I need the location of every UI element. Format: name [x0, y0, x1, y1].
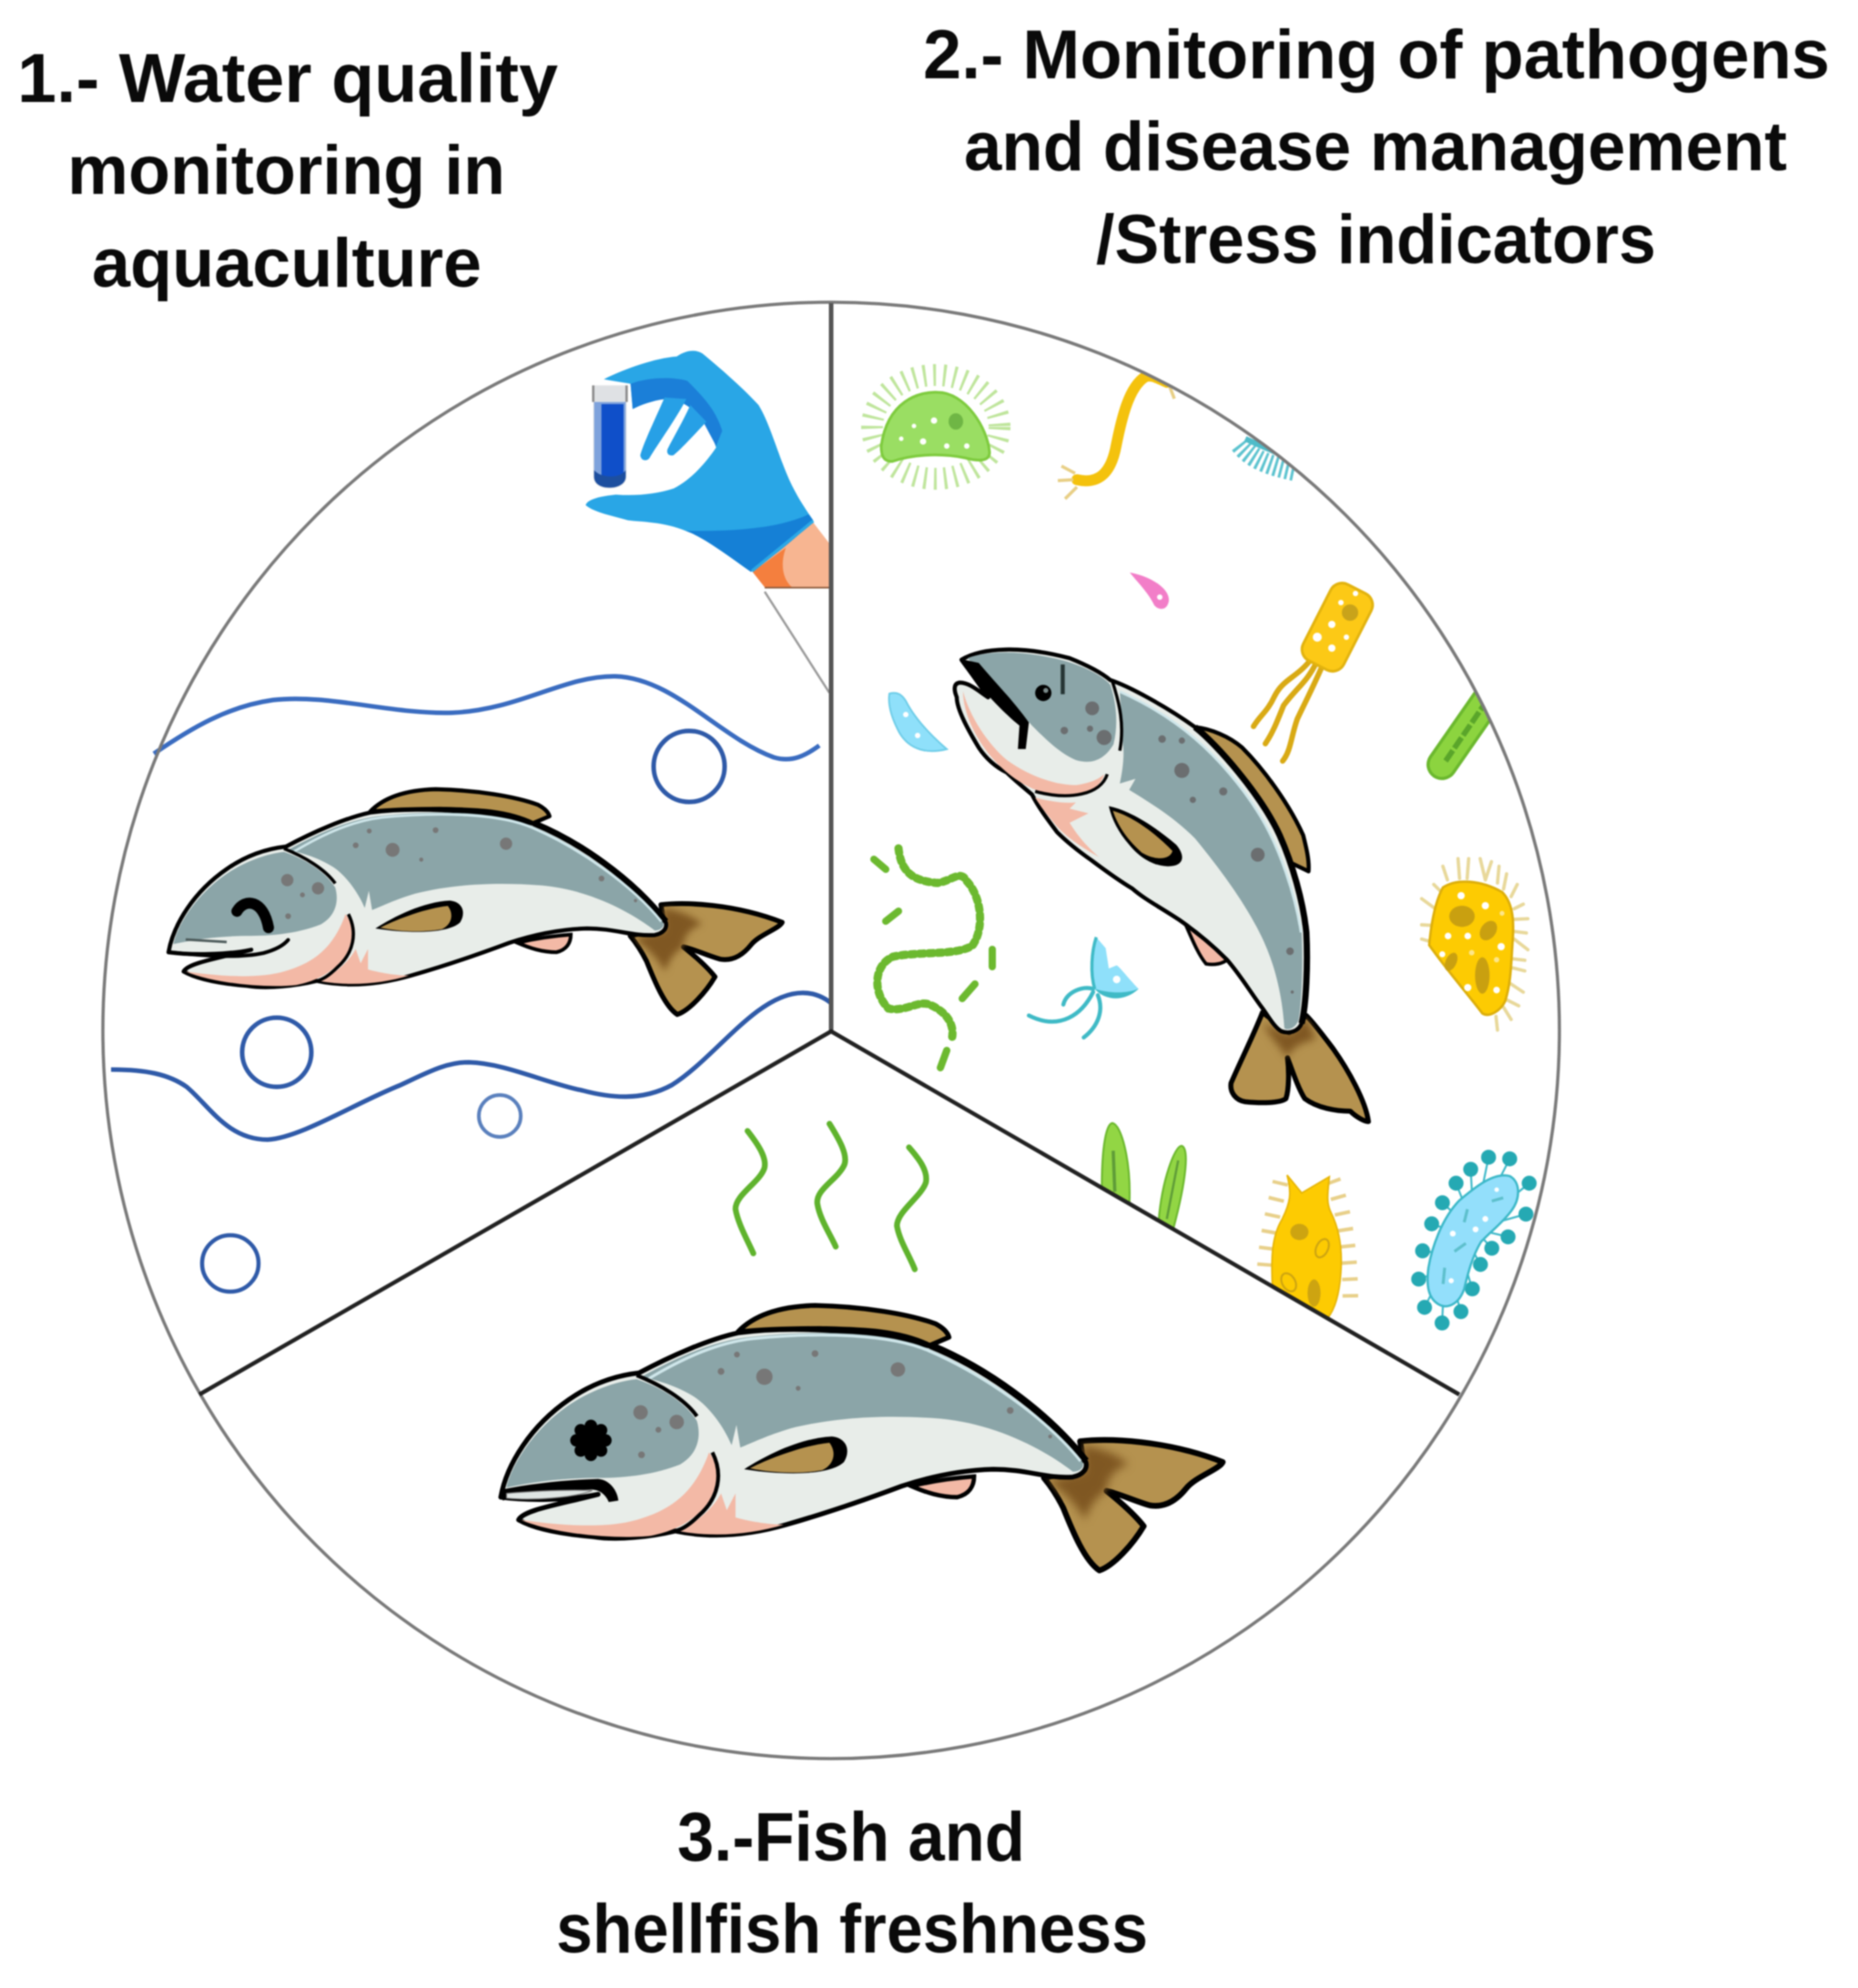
- panel: water quality sector: [111, 350, 831, 1292]
- thin pointer line under hand: [765, 592, 829, 693]
- fish: stressed salmon leaping: [955, 650, 1368, 1121]
- heading: sector 3: [556, 1799, 1148, 1968]
- air bubbles: [202, 731, 725, 1292]
- microbe: pink comma: [1130, 573, 1169, 609]
- microbe: blue bacterium with teal dots: [1411, 1150, 1537, 1331]
- microbe: green beaded chain: [874, 848, 992, 1068]
- upper water wave: [154, 676, 819, 759]
- heading: sector 3: 3.-Fish and: [677, 1799, 1025, 1876]
- wheel outline and sector dividers: [103, 302, 1559, 1759]
- microbe: green ciliate: [872, 375, 1000, 479]
- odour lines: [736, 1124, 926, 1269]
- icon: gloved hand holding test vial: [585, 350, 831, 588]
- microbe: yellow amoeba with cilia: [1422, 858, 1528, 1030]
- microbe: teal ciliate clipped at rim: [1240, 439, 1302, 472]
- panel: pathogens and stress sector: [872, 375, 1537, 1331]
- microbe: yellow horned protozoan: [1264, 1175, 1350, 1318]
- lower water wave: [111, 993, 831, 1140]
- heading: sector 1: aquaculture: [92, 225, 482, 302]
- microbe: green pill clipped at rim: [1442, 678, 1502, 765]
- microbe: yellow flagellate worm: [1058, 376, 1178, 499]
- microbe: yellow rectangle with tentacles: [1254, 579, 1377, 761]
- heading: sector 2: [923, 16, 1830, 279]
- algae: green blades: [1102, 1123, 1186, 1229]
- heading: sector 1: monitoring in: [67, 132, 505, 209]
- panel: freshness sector: [501, 1124, 1223, 1570]
- heading: sector 2: and disease management: [964, 108, 1787, 186]
- fish: spoiled salmon: [501, 1305, 1223, 1570]
- heading: sector 2: /Stress indicators: [1096, 201, 1656, 279]
- microbe: cyan jellyfish: [1029, 938, 1139, 1038]
- microbe: cyan crescent: [889, 693, 947, 751]
- heading: sector 2: 2.- Monitoring of pathogens: [923, 16, 1830, 94]
- heading: sector 1: 1.- Water quality: [17, 40, 558, 117]
- fish: healthy salmon: [168, 789, 782, 1014]
- heading: sector 3: shellfish freshness: [556, 1891, 1148, 1968]
- heading: sector 1: [17, 40, 558, 302]
